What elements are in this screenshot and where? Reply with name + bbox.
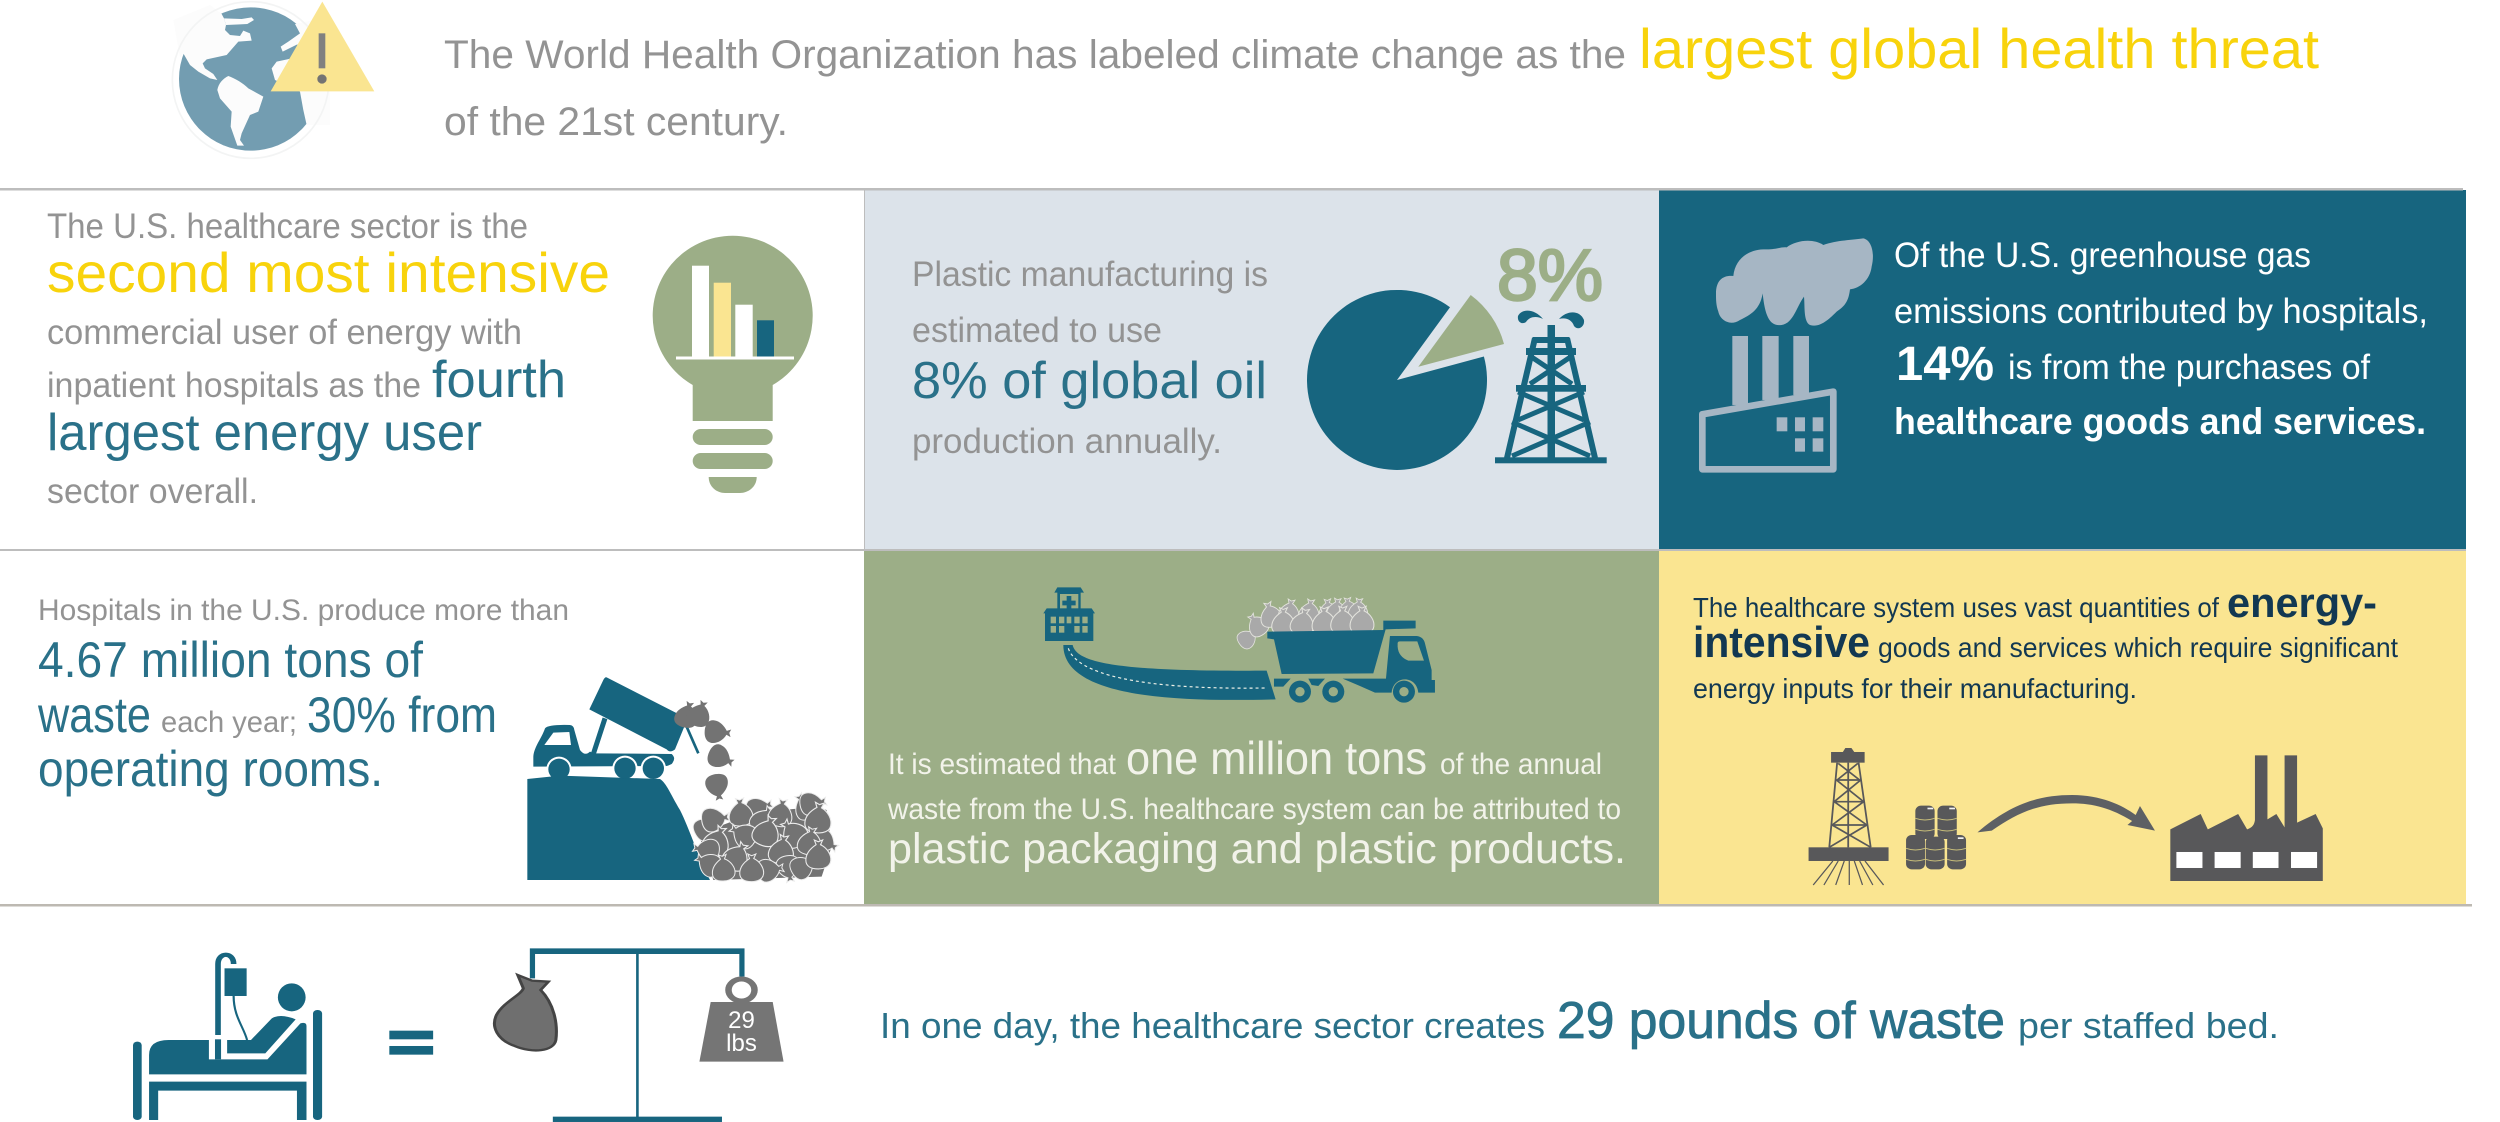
- icon: factory with smoke: [1702, 238, 1873, 469]
- text: hospital waste statement: each year;: [161, 706, 297, 739]
- text: energy use statement: The U.S. healthcare sector is the: [47, 207, 528, 246]
- text: one million tons statement: It is estimated that: [888, 748, 1117, 781]
- icon: oil derrick with gushing oil: [1495, 311, 1607, 463]
- text: hospital waste statement: waste: [37, 687, 151, 743]
- text: energy use statement: second most intensive: [47, 241, 610, 304]
- text: 29 pounds of waste statement: per staffed bed.: [2018, 1005, 2279, 1046]
- text: one million tons statement: of the annual: [1440, 748, 1602, 781]
- heading: WHO statement: The World Health Organization has labeled climate change as the: [444, 33, 1626, 77]
- text: 29 pounds of waste statement: In one day, the healthcare sector creates: [880, 1005, 1545, 1046]
- icon: patient in hospital bed: [133, 955, 322, 1120]
- heading: WHO statement: largest global health threat: [1639, 17, 2319, 80]
- chart: pie with 8% slice: [1307, 290, 1504, 470]
- text: 29 pounds of waste statement: [880, 992, 2279, 1050]
- text: hospital waste statement: 4.67 million tons of: [38, 632, 423, 688]
- panel: plastic manufacturing background: [864, 190, 1659, 550]
- text: hospital waste statement: operating rooms.: [38, 741, 383, 797]
- icon: oil rig and barrels: [1809, 748, 1966, 885]
- text: energy use statement: fourth: [432, 351, 566, 409]
- text: energy use statement: sector overall.: [47, 472, 258, 511]
- text: greenhouse gas statement: healthcare goods and services.: [1894, 401, 2426, 442]
- text: plastic manufacturing statement: [912, 255, 1268, 461]
- text: 29 pounds of waste statement: 29 pounds of waste: [1557, 992, 2005, 1050]
- text: one million tons statement: one million tons: [1126, 732, 1427, 784]
- text: plastic manufacturing statement: production annually.: [912, 422, 1222, 461]
- icon: hospital, road and waste truck: [1043, 587, 1435, 703]
- text: plastic manufacturing statement: Plastic manufacturing is: [912, 255, 1268, 294]
- text: hospital waste statement: 30% from: [307, 687, 497, 743]
- icon: balance scale with bag and weight: lbs: [726, 1030, 757, 1057]
- heading: WHO statement: of the 21st century.: [444, 100, 788, 144]
- icon: equals sign: [389, 1031, 433, 1055]
- text: greenhouse gas statement: emissions contributed by hospitals,: [1894, 292, 2428, 331]
- text: one million tons statement: [887, 732, 1626, 873]
- arrow: oil to factory: [1977, 795, 2155, 832]
- panel: one million tons background: [864, 550, 1659, 905]
- text: hospital waste statement: Hospitals in the U.S. produce more than: [38, 594, 569, 627]
- text: hospital waste statement: [37, 594, 569, 797]
- text: greenhouse gas statement: Of the U.S. greenhouse gas: [1894, 236, 2311, 275]
- icon: dump truck unloading bags on a cliff: [527, 677, 842, 884]
- text: energy-intensive statement: energy inputs for their manufacturing.: [1693, 673, 2137, 704]
- panel: greenhouse gas background: [1659, 190, 2466, 550]
- text: one million tons statement: plastic packaging and plastic products.: [888, 825, 1626, 873]
- heading: WHO statement: [444, 17, 2319, 144]
- text: plastic manufacturing statement: 8% of global oil: [912, 352, 1267, 410]
- text: energy use statement: commercial user of energy with: [47, 313, 522, 352]
- text: greenhouse gas statement: [1894, 236, 2428, 442]
- text: energy-intensive statement: [1693, 579, 2398, 704]
- text: greenhouse gas statement: is from the purchases of: [2008, 348, 2370, 387]
- text: one million tons statement: waste from the U.S. healthcare system can be attributed to: [887, 793, 1621, 826]
- icon: balance scale with bag and weight: [494, 948, 784, 1122]
- text: energy-intensive statement: energy-: [2227, 579, 2377, 626]
- text: energy use statement: inpatient hospitals as the: [47, 366, 421, 405]
- icon: light bulb with bar chart: [653, 236, 813, 493]
- text: plastic manufacturing statement: estimated to use: [912, 311, 1162, 350]
- text: energy-intensive statement: goods and services which require significant: [1878, 632, 2398, 663]
- icon: balance scale with bag and weight: 29: [728, 1007, 755, 1034]
- text: energy use statement: [47, 207, 610, 511]
- label: 8%: 8%: [1497, 236, 1603, 316]
- text: energy-intensive statement: intensive: [1693, 618, 1870, 667]
- icon: factory: [2170, 755, 2323, 881]
- text: energy use statement: largest energy user: [47, 404, 482, 462]
- icon: globe with warning triangle: [172, 2, 374, 158]
- text: greenhouse gas statement: 14%: [1896, 338, 1994, 391]
- panel: energy-intensive goods background: [1659, 550, 2466, 905]
- text: energy-intensive statement: The healthcare system uses vast quantities of: [1693, 592, 2219, 623]
